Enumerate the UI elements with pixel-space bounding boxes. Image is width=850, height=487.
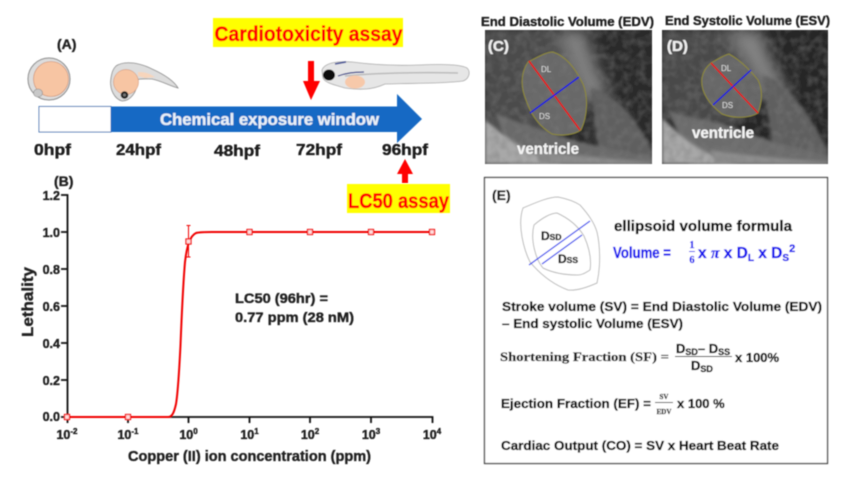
panel D: ESV micrograph — [662, 13, 830, 164]
diagram: ventricle diameters — [521, 197, 600, 290]
DL DS labels: DL — [721, 64, 732, 73]
ventricle label: ventricle — [517, 141, 579, 158]
DL DS labels: DL — [541, 65, 552, 74]
ventricle outline — [522, 52, 587, 135]
shortening fraction: D — [691, 358, 700, 373]
x tick labels: 4 — [437, 427, 442, 436]
volume formula: Volume = — [613, 245, 671, 262]
callout: LC50 assay: LC50 assay — [348, 190, 449, 213]
panel E border — [484, 178, 828, 464]
x tick labels: 0 — [193, 427, 198, 436]
label D: (D) — [667, 38, 688, 55]
heading D: End Systolic Volume (ESV) — [665, 13, 830, 28]
time labels — [34, 142, 429, 160]
ejection fraction: SV — [660, 393, 668, 401]
panel C: EDV micrograph — [481, 14, 654, 164]
panel A: exposure timeline — [28, 18, 469, 213]
LC50 annotation: 0.77 ppm (28 nM) — [235, 309, 354, 325]
volume formula: x D — [754, 245, 782, 262]
x tick labels: 1 — [254, 427, 259, 436]
axes — [61, 195, 432, 423]
shortening fraction: SD — [685, 347, 698, 357]
x tick labels: 10 — [117, 428, 131, 442]
icon: embryo 24hpf — [111, 63, 178, 101]
callout: cardiotoxicity assay: Cardiotoxicity assay — [214, 23, 403, 46]
volume formula: 6 — [689, 255, 695, 266]
x tick labels: 10 — [56, 428, 70, 442]
dose response curve — [64, 226, 434, 420]
x tick labels: 10 — [301, 428, 315, 442]
micrograph C — [485, 30, 652, 164]
ejection fraction: Ejection Fraction (EF) = — [501, 396, 651, 411]
micrograph D — [662, 30, 828, 164]
shortening fraction: D — [676, 341, 685, 356]
y tick labels: 0.2 — [43, 374, 60, 388]
time labels: 72hpf — [296, 142, 343, 159]
ventricle outline — [702, 54, 761, 117]
stroke volume text: Stroke volume (SV) = End Diastolic Volume (EDV) — [502, 299, 822, 314]
shortening fraction: x 100% — [735, 350, 780, 365]
diagram: ventricle diameters: DSD — [541, 229, 561, 243]
LC50 annotation: LC50 (96hr) = — [235, 290, 328, 306]
x tick labels: 10 — [423, 428, 437, 442]
cardiac output: Cardiac Output (CO) = SV x Heart Beat Rate — [501, 438, 779, 453]
volume formula: 2 — [789, 243, 795, 255]
x tick labels: 10 — [362, 428, 376, 442]
micrograph C: DS — [539, 112, 550, 121]
ejection fraction — [501, 393, 725, 416]
label B: (B) — [54, 173, 73, 189]
micrograph D: DS — [722, 101, 733, 110]
icon: larva 72-96hpf — [322, 62, 469, 89]
shortening fraction: Shortening Fraction (SF) = — [500, 349, 669, 364]
arrow: cardiotoxicity down — [303, 61, 320, 100]
x tick labels: -2 — [70, 427, 78, 436]
panel B: lethality chart — [20, 173, 442, 465]
diagram: ventricle diameters: DSS — [558, 252, 578, 266]
y axis title: Lethality — [20, 267, 37, 337]
LC50 annotation — [235, 290, 354, 325]
shortening fraction — [500, 341, 780, 374]
time labels: 0hpf — [34, 142, 72, 159]
x tick labels — [56, 427, 442, 442]
stroke volume text — [502, 299, 822, 331]
time labels: 48hpf — [214, 143, 261, 160]
x tick labels: 10 — [179, 428, 193, 442]
short axis — [530, 77, 579, 113]
heading C: End Diastolic Volume (EDV) — [481, 14, 654, 29]
short axis — [713, 70, 751, 105]
x tick labels: 2 — [315, 427, 320, 436]
icon: embryo 0hpf — [28, 58, 70, 100]
x axis title: Copper (II) ion concentration (ppm) — [128, 448, 371, 465]
x tick labels: -1 — [131, 427, 139, 436]
ellipsoid formula heading: ellipsoid volume formula — [614, 219, 793, 235]
arrow label: Chemical exposure window — [160, 111, 379, 129]
x tick labels: 10 — [240, 428, 254, 442]
ventricle label: ventricle — [692, 125, 754, 142]
shortening fraction: SD — [700, 364, 713, 374]
shortening fraction: – D — [698, 341, 718, 356]
volume formula: L — [748, 253, 754, 264]
arrow: chemical exposure window — [111, 94, 422, 143]
volume formula: 1 — [689, 240, 695, 251]
long axis — [529, 61, 580, 130]
volume formula: x π x D — [698, 245, 748, 262]
label C: (C) — [488, 38, 509, 55]
label A: (A) — [57, 36, 76, 52]
label E: (E) — [492, 187, 511, 203]
ejection fraction: EDV — [657, 408, 671, 416]
y tick labels: 0.8 — [43, 263, 60, 277]
timeline: white pre-exposure box — [39, 106, 111, 132]
y tick labels: 1.2 — [43, 189, 60, 203]
ejection fraction: x 100 % — [677, 396, 725, 411]
y tick labels: 1.0 — [43, 226, 60, 240]
y tick labels: 0.0 — [43, 410, 60, 424]
volume formula: S — [782, 253, 789, 264]
y tick labels: 0.6 — [43, 300, 60, 314]
time labels: 24hpf — [116, 142, 162, 159]
arrow: LC50 up — [397, 159, 413, 183]
stroke volume text: – End systolic Volume (ESV) — [502, 316, 683, 331]
panel E: formulas — [484, 178, 828, 464]
time labels: 96hpf — [382, 142, 429, 159]
y tick labels — [43, 189, 60, 424]
x tick labels: 3 — [376, 427, 381, 436]
y tick labels: 0.4 — [43, 337, 60, 351]
shortening fraction: SS — [718, 347, 730, 357]
volume formula — [613, 240, 795, 266]
long axis — [711, 63, 758, 113]
